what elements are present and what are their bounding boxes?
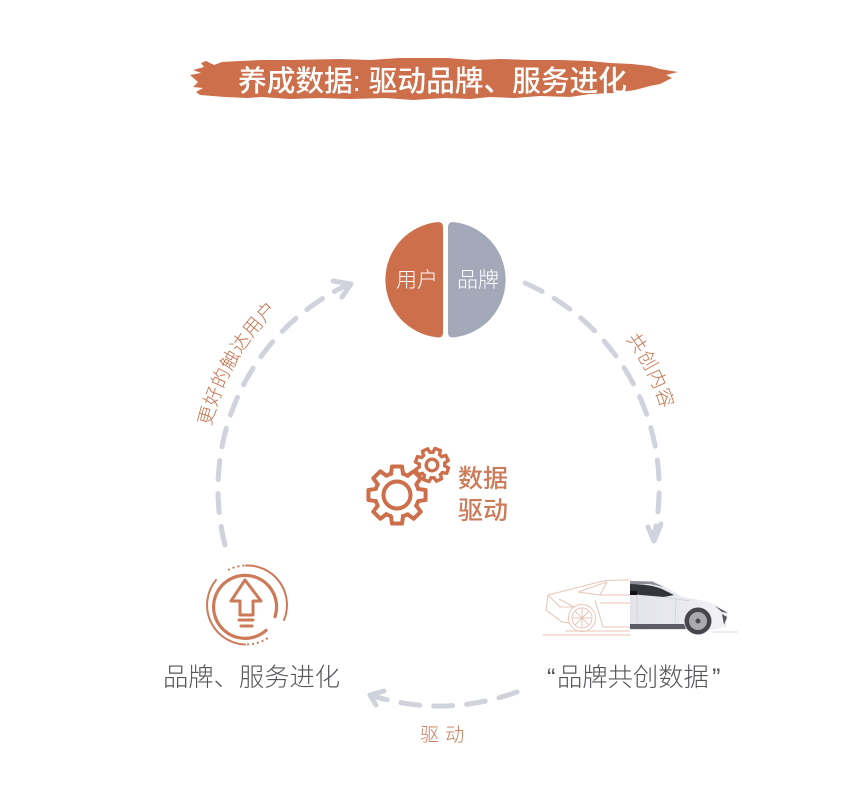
rendered half body	[630, 581, 728, 630]
outer dots top	[228, 566, 245, 570]
title text: 养成数据: 驱动品牌、服务进化	[238, 66, 627, 98]
ground shadow	[712, 631, 738, 633]
arrow: brand evolution to user	[218, 281, 351, 545]
brand half	[448, 222, 506, 338]
label: co-create content: 共创内容	[626, 334, 674, 407]
window	[630, 584, 674, 597]
large gear	[368, 466, 426, 524]
brush stroke background	[190, 58, 678, 100]
center label: data driven	[458, 465, 508, 525]
label: brand and service evolution: 品牌、服务进化	[163, 664, 340, 692]
wheel	[684, 608, 712, 634]
sketch half	[543, 580, 630, 635]
front lamp	[715, 606, 728, 625]
roof highlight	[630, 581, 664, 587]
center label: data driven: 数据	[458, 465, 508, 493]
label: brand co-created data: ”	[712, 664, 720, 692]
label: drive: 驱 动	[420, 724, 465, 746]
title banner	[190, 58, 678, 100]
door lines	[637, 595, 690, 623]
label: brand co-created data: “	[547, 664, 555, 692]
brand label: 品牌	[457, 269, 499, 292]
outer dots bottom	[247, 638, 268, 644]
center label: data driven: 驱动	[458, 497, 508, 525]
inner ring	[214, 575, 277, 638]
user half	[385, 222, 443, 338]
small gear	[411, 444, 453, 486]
user label: 用户	[396, 269, 438, 292]
arrow base lines	[239, 620, 253, 626]
user and brand split circle	[385, 222, 506, 338]
lower body shade	[630, 624, 686, 629]
outer arc right	[246, 565, 287, 620]
up arrow	[231, 580, 261, 615]
label: better reach: 更好的触达用户	[196, 302, 272, 426]
label: brand co-created data: 品牌共创数据	[557, 664, 709, 692]
outer arc left	[207, 580, 245, 644]
rear pillar black	[630, 591, 637, 595]
arrow: co-created data to brand evolution	[370, 691, 517, 706]
icon: gears	[368, 444, 453, 524]
car image: half sketch, half render	[543, 580, 738, 635]
arrow: user and brand to co-created data	[525, 283, 661, 541]
icon: brand upgrade arrow	[207, 565, 287, 644]
